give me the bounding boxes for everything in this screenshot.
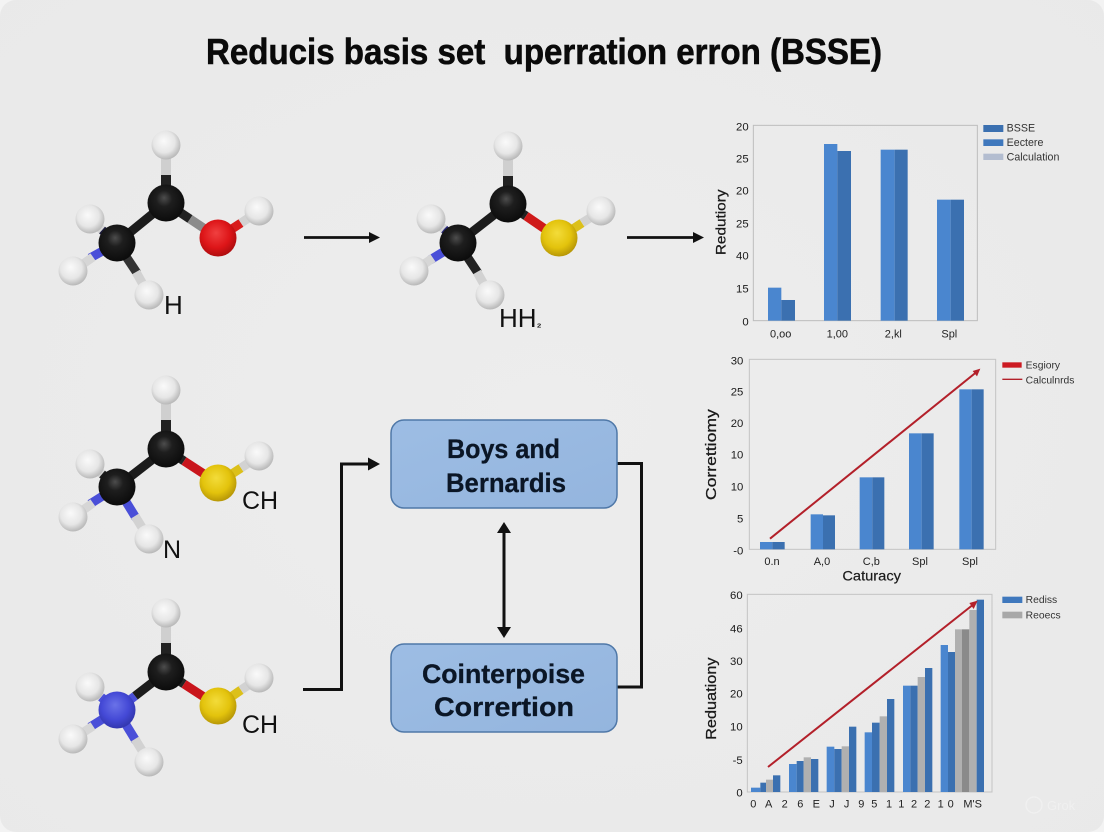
x axis labels: 9 [858, 799, 864, 811]
y axis labels: 40 [736, 251, 749, 263]
y axis labels: 20 [736, 186, 749, 198]
y axis labels: 20 [730, 689, 743, 701]
x axis labels: Spl [912, 556, 928, 568]
y axis title: Reduationy [704, 657, 720, 740]
y axis labels: 15 [736, 284, 749, 296]
x axis labels: J [829, 799, 835, 811]
y axis labels: 0 [736, 788, 743, 800]
y axis labels: 46 [730, 623, 743, 635]
legend: Rediss [1026, 595, 1057, 606]
bars [768, 144, 964, 321]
x axis title: Caturacy [842, 568, 901, 584]
y axis labels: 10 [731, 450, 743, 462]
molecule 1: red oxygen: H [164, 290, 183, 320]
x axis labels: 0,oo [770, 328, 791, 340]
x axis labels: Spl [941, 328, 957, 340]
title: Reducis basis set uperration erron (BSSE) [206, 31, 882, 72]
x axis labels: A [765, 799, 773, 811]
molecule 2: yellow sulfur: HH₂ [499, 303, 542, 333]
bars [760, 389, 984, 549]
x axis labels: Spl [962, 556, 978, 568]
watermark: Grok [1047, 798, 1076, 813]
x axis labels: 0 [948, 799, 954, 811]
box: Boys and Bernardis: Bernardis [446, 468, 566, 498]
y axis labels: 5 [737, 514, 743, 526]
legend: Calculation [1007, 151, 1059, 163]
y axis labels: 10 [731, 481, 743, 493]
x axis labels: 2,kl [885, 328, 902, 340]
y axis title: Redutiory [712, 189, 728, 255]
x axis labels: 2 [911, 799, 917, 811]
bars [751, 600, 984, 792]
legend: Calculnrds [1026, 376, 1074, 387]
x axis labels [750, 799, 982, 811]
x axis labels: 2 [782, 799, 788, 811]
y axis labels: 30 [730, 656, 743, 668]
x axis labels: M'S [963, 799, 982, 811]
x axis labels: J [844, 799, 849, 811]
watermark [1026, 797, 1076, 813]
molecule 3: carbon, sulfur, blue bond [58, 376, 278, 564]
x axis labels: C,b [863, 556, 880, 568]
trend arrow [768, 601, 978, 767]
y axis labels: 20 [736, 122, 749, 134]
molecule 1: red oxygen [58, 130, 274, 320]
box: Boys and Bernardis [391, 420, 617, 508]
legend: Eectere [1007, 137, 1043, 149]
molecule 3: carbon, sulfur, blue bond: N [163, 536, 181, 564]
box: Counterpoise Correction: Corrertion [434, 692, 574, 722]
box: Counterpoise Correction: Cointerpoise [422, 659, 585, 689]
legend [1002, 595, 1061, 622]
connector: Boys and Bernardis to Counterpoise Correction [617, 464, 642, 687]
y axis labels: 25 [736, 218, 749, 230]
x axis labels: 0 [750, 799, 756, 811]
trend arrow [770, 369, 980, 539]
connector arrow: molecules to Boys and Bernardis [303, 458, 380, 690]
box: Boys and Bernardis: Boys and [447, 434, 560, 464]
y axis labels [731, 355, 743, 558]
legend [1002, 361, 1074, 387]
molecule 3: carbon, sulfur, blue bond: CH [242, 487, 278, 515]
y axis labels: -5 [733, 755, 743, 767]
x axis labels: A,0 [814, 556, 830, 568]
chart 1: bar chart [712, 122, 1059, 340]
x axis labels: 0.n [764, 556, 780, 568]
x axis labels: E [813, 799, 820, 811]
legend: BSSE [1007, 123, 1035, 135]
x axis labels [764, 556, 978, 568]
y axis labels [736, 122, 749, 328]
y axis labels: 10 [730, 722, 743, 734]
x axis labels: 1,00 [827, 328, 848, 340]
legend: Reoecs [1026, 611, 1061, 622]
y axis labels: 25 [731, 387, 743, 399]
x axis labels: 5 [871, 799, 877, 811]
legend: Esgiory [1026, 361, 1061, 372]
x axis labels [770, 328, 957, 340]
box: Counterpoise Correction [391, 644, 617, 732]
y axis title: Correttiomy [704, 408, 720, 500]
molecule 2: yellow sulfur [400, 132, 616, 333]
y axis labels: 30 [731, 355, 743, 367]
x axis labels: 1 [938, 799, 944, 811]
double arrow between boxes [497, 522, 511, 638]
arrow: molecule 1 to molecule 2 [304, 232, 380, 243]
y axis labels: 20 [731, 418, 743, 430]
legend [983, 123, 1059, 163]
molecule 4: blue nitrogen: CH [242, 711, 278, 739]
chart 3: grouped bar chart with trend arrow [704, 590, 1061, 811]
x axis labels: 6 [797, 799, 803, 811]
x axis labels: 1 [886, 799, 892, 811]
y axis labels: 25 [736, 153, 749, 165]
y axis labels: 60 [730, 590, 743, 602]
y axis labels [730, 590, 743, 800]
x axis labels: 1 [898, 799, 904, 811]
y axis labels: 0 [742, 316, 749, 328]
molecule 4: blue nitrogen [58, 598, 278, 776]
x axis labels: 2 [924, 799, 930, 811]
y axis labels: -0 [733, 546, 743, 558]
arrow: molecule 2 to chart 1 [627, 232, 704, 243]
chart 2: bar chart with trend arrow [704, 355, 1074, 584]
